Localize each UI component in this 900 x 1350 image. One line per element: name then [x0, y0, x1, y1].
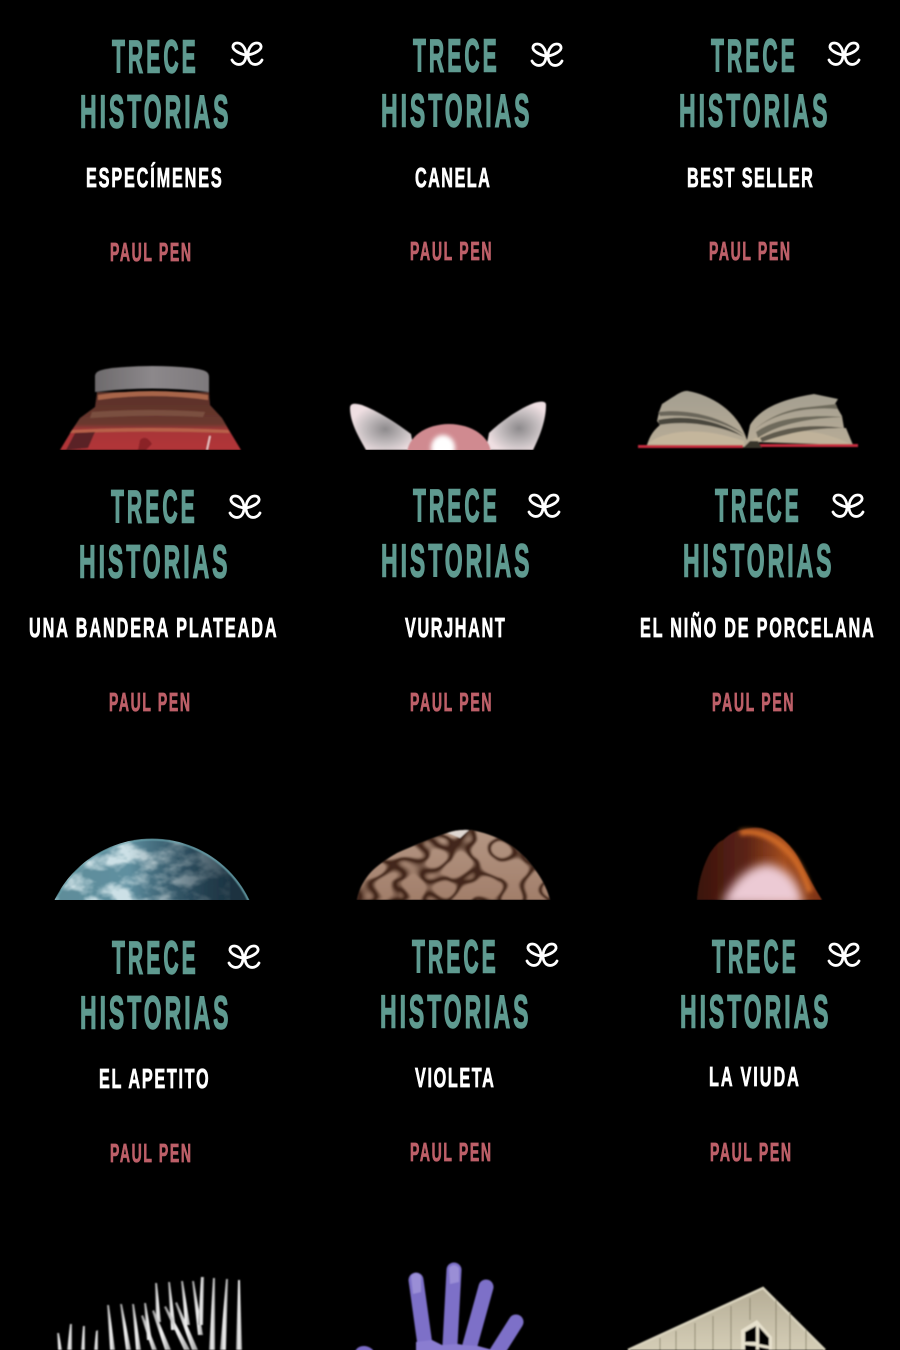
series title: [683, 480, 832, 587]
series title: [680, 931, 828, 1038]
story title: VIOLETA: [415, 1061, 494, 1093]
story title: UNA BANDERA PLATEADA: [29, 611, 277, 643]
icon: publisher ornament: [833, 495, 863, 516]
panel: Vurjhant: [350, 480, 559, 905]
image: brain: [356, 828, 550, 900]
series title: [679, 30, 828, 137]
author: PAUL PEN: [109, 689, 190, 717]
image: jar: [60, 366, 241, 450]
image: fork tines: [57, 1277, 242, 1350]
series title: HISTORIAS: [380, 986, 528, 1038]
series title: TRECE: [112, 31, 196, 83]
series title: HISTORIAS: [80, 987, 228, 1039]
icon: publisher ornament: [529, 495, 559, 516]
series title: HISTORIAS: [680, 986, 828, 1038]
panel: Especímenes: [60, 31, 262, 450]
story title: EL APETITO: [99, 1062, 209, 1094]
story title: BEST SELLER: [687, 161, 813, 193]
author: PAUL PEN: [712, 689, 794, 717]
series title: TRECE: [711, 30, 795, 82]
icon: publisher ornament: [229, 946, 259, 967]
series title: [80, 31, 228, 138]
series title: TRECE: [111, 481, 195, 533]
story title: EL NIÑO DE PORCELANA: [640, 611, 874, 643]
image: red-haired head: [697, 828, 822, 905]
series title: TRECE: [413, 480, 497, 532]
series title: HISTORIAS: [679, 85, 828, 137]
icon: publisher ornament: [232, 43, 262, 64]
image: hairless cat head: [348, 400, 548, 450]
series title: TRECE: [412, 931, 496, 983]
panel: La viuda: [628, 931, 859, 1350]
panel: Violeta: [355, 931, 557, 1350]
author: PAUL PEN: [410, 689, 492, 717]
panel: El niño de porcelana: [640, 480, 874, 905]
panel: Best Seller: [638, 30, 859, 448]
icon: publisher ornament: [230, 496, 260, 517]
series title: HISTORIAS: [381, 535, 530, 587]
image: open book: [638, 391, 858, 448]
series title: [380, 931, 528, 1038]
series title: [79, 481, 228, 588]
icon: publisher ornament: [527, 944, 557, 965]
series title: HISTORIAS: [80, 86, 228, 138]
image: planet earth: [54, 838, 250, 900]
series title: TRECE: [413, 30, 497, 82]
story title: CANELA: [415, 161, 490, 193]
icon: publisher ornament: [829, 944, 859, 965]
author: PAUL PEN: [410, 1139, 491, 1167]
series title: [381, 30, 530, 137]
image: house gable: [628, 1288, 825, 1350]
story title: LA VIUDA: [709, 1060, 799, 1092]
author: PAUL PEN: [710, 1139, 791, 1167]
series title: TRECE: [715, 480, 799, 532]
series title: [80, 932, 228, 1039]
image: purple hand: [355, 1265, 516, 1350]
story title: ESPECÍMENES: [86, 161, 222, 193]
series title: TRECE: [112, 932, 196, 984]
author: PAUL PEN: [110, 1140, 191, 1168]
icon: publisher ornament: [829, 43, 859, 64]
author: PAUL PEN: [410, 238, 492, 266]
panel: El apetito: [57, 932, 259, 1350]
panel: Una bandera plateada: [30, 489, 276, 900]
series title: HISTORIAS: [683, 535, 832, 587]
series title: HISTORIAS: [79, 536, 228, 588]
series title: HISTORIAS: [381, 85, 530, 137]
series title: [381, 480, 530, 587]
author: PAUL PEN: [110, 239, 191, 267]
author: PAUL PEN: [709, 238, 790, 266]
series title: TRECE: [712, 931, 796, 983]
story title: VURJHANT: [405, 611, 505, 643]
icon: publisher ornament: [532, 44, 562, 65]
panel: Canela: [350, 30, 562, 484]
